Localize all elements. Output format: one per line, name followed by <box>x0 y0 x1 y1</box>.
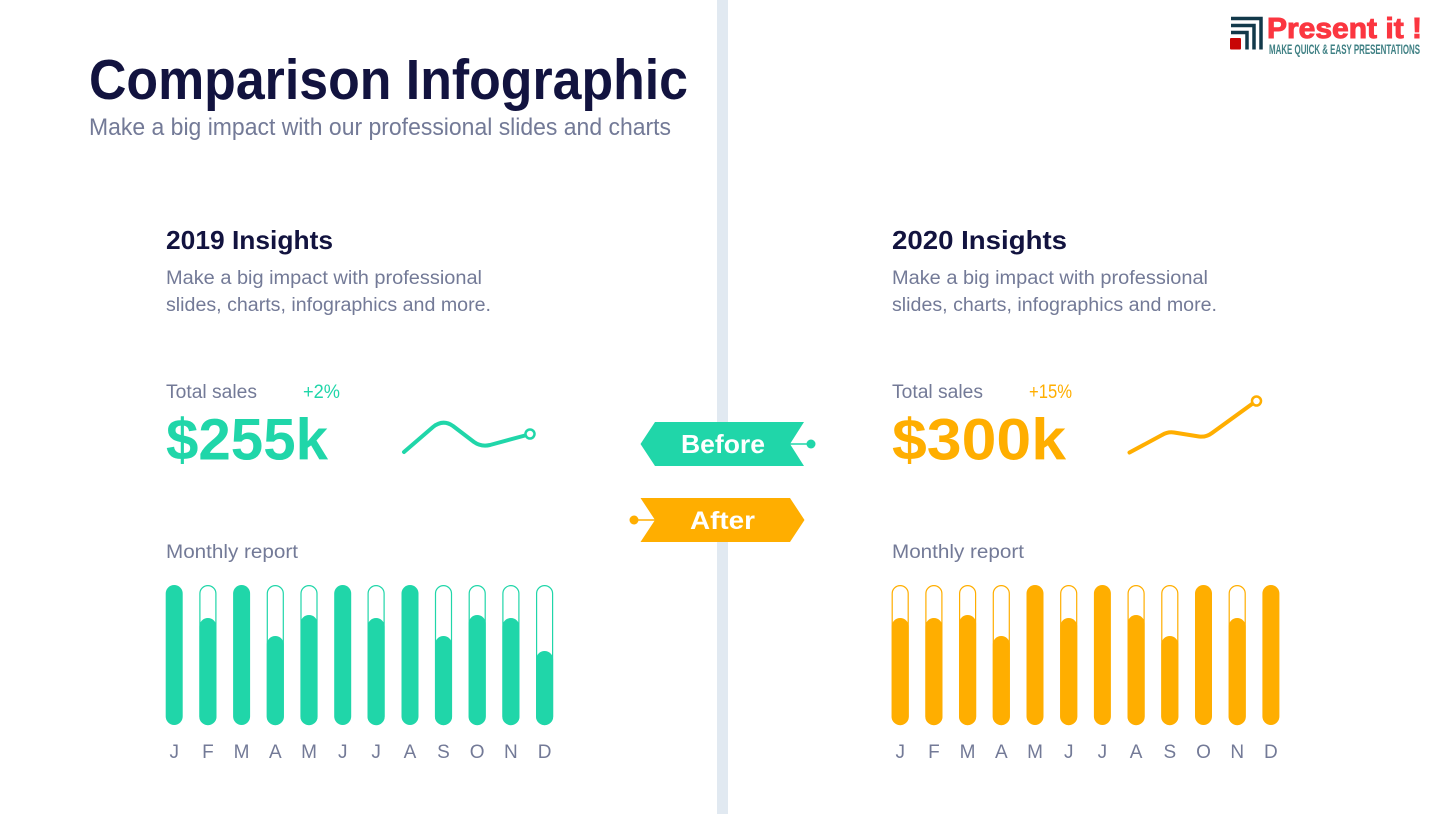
arrow: after <box>630 498 804 542</box>
bar chart: 2020 monthly: O <box>1196 742 1211 763</box>
bar chart: 2020 monthly: A <box>995 742 1008 763</box>
arrow: after: After <box>690 507 755 535</box>
bar chart: 2019 monthly: M <box>234 742 250 763</box>
bar chart: 2020 monthly: D <box>1264 742 1278 763</box>
panel: 2019 insights <box>166 225 553 763</box>
bar chart: 2020 monthly: N <box>1230 742 1244 763</box>
bar chart: 2019 monthly: O <box>470 742 485 763</box>
description: 2020: slides, charts, infographics and more. <box>892 295 1217 316</box>
logo <box>1230 13 1422 57</box>
description: 2019 <box>166 268 491 316</box>
panel: 2020 insights <box>892 225 1279 763</box>
bar chart: 2019 monthly: A <box>269 742 282 763</box>
description: 2019: Make a big impact with professional <box>166 268 482 289</box>
bar chart: 2020 monthly: S <box>1163 742 1176 763</box>
bar chart: 2019 monthly: J <box>371 742 381 763</box>
logo: Present it ! <box>1267 13 1422 45</box>
monthly report label: Monthly report <box>166 542 299 563</box>
title: Comparison Infographic <box>89 48 688 112</box>
bar chart: 2019 monthly: A <box>404 742 417 763</box>
value: $300k: $300k <box>892 408 1067 472</box>
bar chart: 2019 monthly <box>166 585 553 763</box>
bar chart: 2020 monthly: J <box>1064 742 1073 763</box>
total sales label: Total sales <box>892 382 983 403</box>
bar chart: 2020 monthly: J <box>895 742 905 763</box>
arrow: before <box>640 422 816 466</box>
bar chart: 2019 monthly: M <box>301 742 317 763</box>
description: 2020: Make a big impact with professional <box>892 268 1208 289</box>
bar chart: 2019 monthly: J <box>338 742 347 763</box>
monthly report label: Monthly report <box>892 542 1025 563</box>
heading: 2019 insights: 2019 Insights <box>166 225 333 255</box>
bar chart: 2019 monthly: F <box>202 742 214 763</box>
heading: 2020 insights: 2020 Insights <box>892 225 1067 255</box>
bar chart: 2019 monthly: J <box>169 742 179 763</box>
sparkline: 2020 <box>1130 396 1261 452</box>
subtitle: Make a big impact with our professional slides and charts <box>89 114 671 141</box>
bar chart: 2019 monthly: D <box>538 742 551 763</box>
bar chart: 2020 monthly: M <box>1027 742 1043 763</box>
change: +2%: +2% <box>303 382 340 403</box>
description: 2020 <box>892 268 1217 316</box>
sparkline: 2019 <box>404 423 534 452</box>
total sales label: Total sales <box>166 382 257 403</box>
bar chart: 2020 monthly <box>892 585 1279 763</box>
value: $255k: $255k <box>166 408 329 472</box>
bar chart: 2020 monthly: A <box>1130 742 1143 763</box>
bar chart: 2020 monthly: M <box>960 742 976 763</box>
bar chart: 2020 monthly: F <box>928 742 940 763</box>
bar chart: 2020 monthly: J <box>1098 742 1107 763</box>
arrow: before: Before <box>681 429 765 459</box>
bar chart: 2019 monthly: N <box>504 742 518 763</box>
description: 2019: slides, charts, infographics and more. <box>166 295 491 316</box>
change: +15%: +15% <box>1029 382 1072 403</box>
bar chart: 2019 monthly: S <box>437 742 450 763</box>
